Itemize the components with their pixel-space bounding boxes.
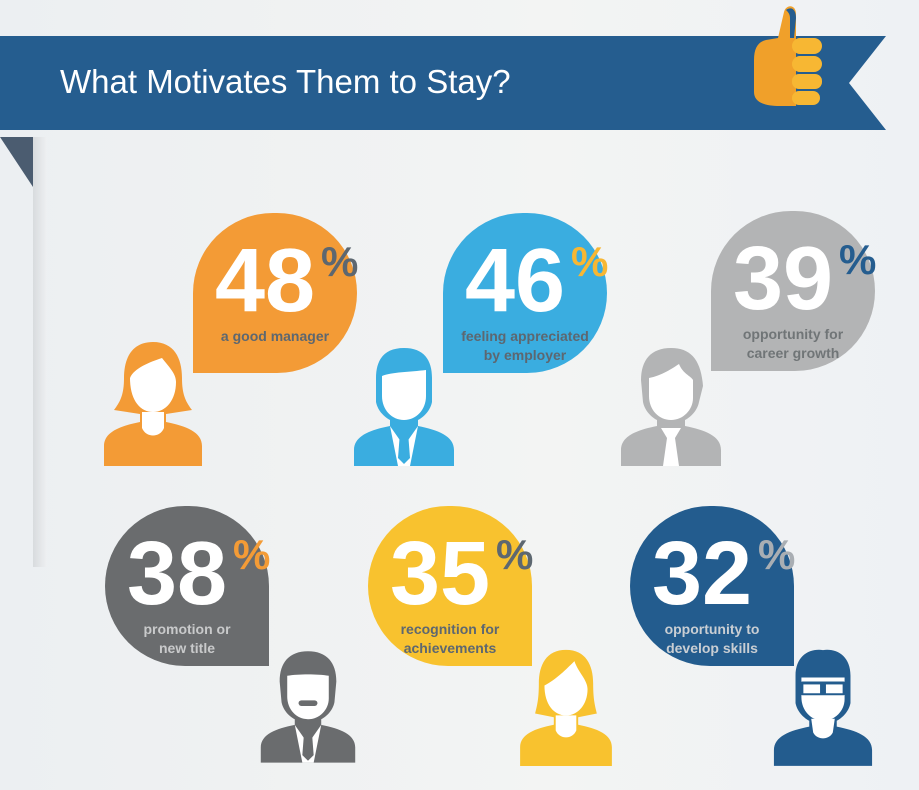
panel: 35% recognition: 35 bbox=[390, 524, 490, 624]
icon: man with glasses bbox=[774, 650, 872, 766]
panel: 35% recognition bbox=[368, 506, 532, 666]
panel: 32% develop skills: develop skills bbox=[666, 640, 758, 656]
panel: 38% promotion: new title bbox=[159, 640, 215, 656]
panel: 35% recognition: achievements bbox=[404, 640, 496, 656]
panel: 39% career growth: opportunity for bbox=[743, 326, 843, 342]
title: What Motivates Them to Stay? bbox=[60, 63, 511, 100]
side panel shading bbox=[33, 137, 47, 567]
icon: man blue bbox=[354, 348, 454, 466]
panel: 48% good manager: 48 bbox=[215, 231, 315, 331]
banner fold triangle bbox=[0, 137, 33, 187]
panel: 35% recognition: recognition for bbox=[401, 621, 499, 637]
icon: woman orange bbox=[104, 342, 202, 466]
icon: man gray bbox=[621, 348, 721, 466]
panel: 38% promotion bbox=[105, 506, 269, 666]
panel: 32% develop skills bbox=[630, 506, 794, 666]
icon: woman yellow bbox=[520, 650, 612, 766]
panel: 38% promotion: % bbox=[233, 531, 270, 578]
panel: 48% good manager: a good manager bbox=[221, 328, 329, 344]
panel: 39% career growth: 39 bbox=[733, 229, 833, 329]
panel: 38% promotion: promotion or bbox=[143, 621, 231, 637]
panel: 32% develop skills: opportunity to bbox=[665, 621, 759, 637]
panel: 39% career growth: career growth bbox=[747, 345, 839, 361]
icon: man with mustache bbox=[260, 651, 356, 763]
panel: 48% good manager: % bbox=[321, 238, 358, 285]
icon: thumbs up bbox=[754, 6, 822, 106]
panel: 32% develop skills: 32 bbox=[652, 524, 752, 624]
panel: 48% good manager bbox=[193, 213, 357, 373]
panel: 38% promotion: 38 bbox=[127, 524, 227, 624]
panel: 39% career growth: % bbox=[839, 236, 876, 283]
panel: 32% develop skills: % bbox=[758, 531, 795, 578]
panel: 46% feeling appreciated: by employer bbox=[484, 347, 566, 363]
banner bbox=[0, 36, 886, 130]
panel: 46% feeling appreciated: % bbox=[571, 238, 608, 285]
panel: 46% feeling appreciated: feeling appreciated bbox=[461, 328, 589, 344]
panel: 46% feeling appreciated: 46 bbox=[465, 231, 565, 331]
panel: 35% recognition: % bbox=[496, 531, 533, 578]
panel: 39% career growth bbox=[711, 211, 875, 371]
panel: 46% feeling appreciated bbox=[443, 213, 607, 373]
